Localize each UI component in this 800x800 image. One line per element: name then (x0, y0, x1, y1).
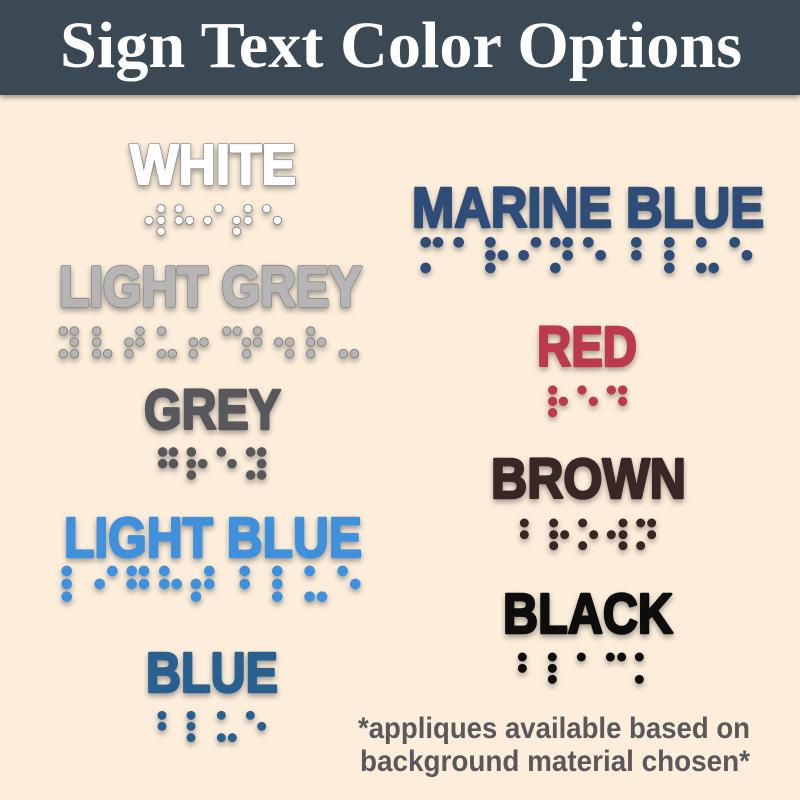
label: WHITE: WHITE (130, 133, 296, 197)
braille: BLACK (518, 652, 644, 684)
label: BROWN: BROWN (491, 447, 686, 511)
label: RED: RED (537, 315, 637, 379)
footnote: *appliques available based on (358, 712, 750, 745)
label: LIGHT GREY: LIGHT GREY (59, 255, 362, 319)
braille: RED (548, 385, 627, 417)
label: BLUE: BLUE (146, 641, 278, 705)
label: BLACK: BLACK (503, 582, 673, 646)
braille: BROWN (520, 518, 656, 550)
label: WHITE: WHITE (130, 133, 296, 197)
title: Sign Text Color Options (60, 9, 742, 82)
label: GREY: GREY (144, 378, 281, 442)
braille: MARINE BLUE (420, 237, 752, 273)
braille: LIGHT GREY (59, 327, 359, 358)
label: MARINE BLUE: MARINE BLUE (412, 176, 764, 240)
footnote: background material chosen* (360, 745, 750, 778)
label: LIGHT BLUE: LIGHT BLUE (64, 506, 362, 570)
label: LIGHT GREY: LIGHT GREY (59, 255, 362, 319)
braille: BLUE (157, 711, 266, 742)
braille: LIGHT BLUE (61, 566, 361, 602)
footnote (358, 712, 750, 778)
braille: WHITE (145, 204, 281, 235)
braille: GREY (158, 447, 266, 480)
header banner (0, 0, 800, 95)
